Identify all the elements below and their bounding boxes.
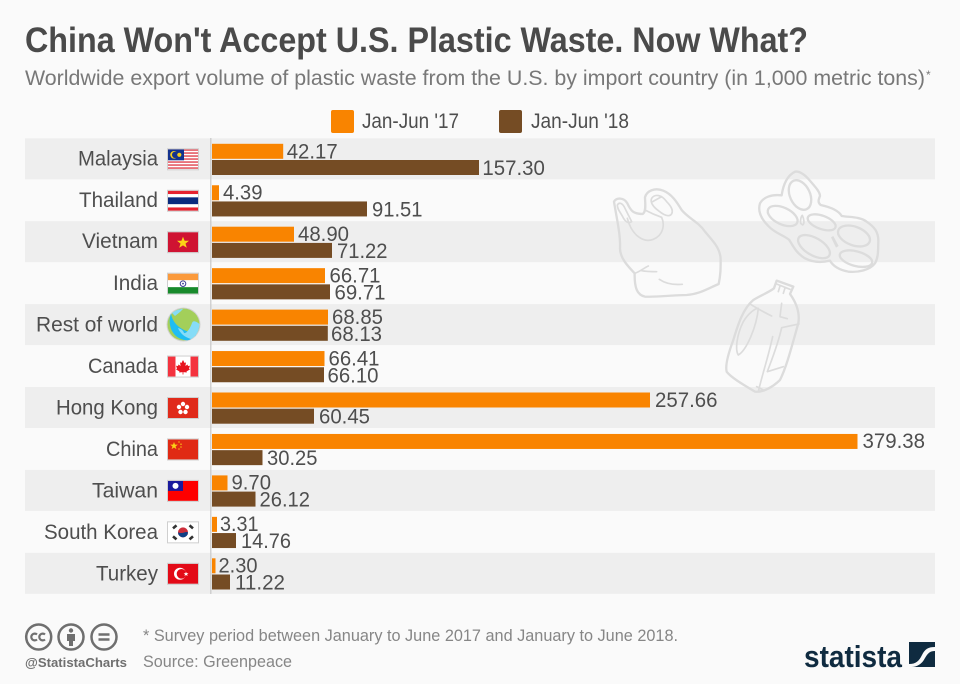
value: 3.31: 3.31	[220, 513, 258, 536]
label: Thailand: Thailand	[79, 189, 158, 212]
value: 157.30: 157.30	[482, 157, 545, 180]
value: 91.51: 91.51	[372, 198, 422, 222]
value: 71.22: 71.22	[337, 240, 388, 263]
icon: attribution	[58, 624, 84, 650]
flag: Malaysia	[168, 149, 198, 170]
label: India: India	[113, 272, 158, 295]
legend	[331, 110, 629, 133]
legend: Jan-Jun '18: Jan-Jun '18	[531, 110, 629, 133]
handle: @StatistaCharts: @StatistaCharts	[25, 656, 127, 670]
bar: South Korea 2018	[212, 533, 236, 548]
value: 14.76: 14.76	[241, 530, 291, 553]
source: Source: Greenpeace	[143, 653, 292, 671]
value: 11.22: 11.22	[235, 572, 285, 594]
value: 26.12: 26.12	[260, 488, 310, 512]
value: 30.25: 30.25	[267, 447, 318, 470]
row: Taiwan	[92, 472, 310, 512]
value: 257.66: 257.66	[655, 389, 718, 412]
icon: six-pack rings	[759, 172, 878, 272]
subtitle: Worldwide export volume of plastic waste from the U.S. by import country (in 1,000 metric tons)	[25, 67, 925, 90]
legend: Jan-Jun '17: Jan-Jun '17	[362, 110, 459, 133]
label: Canada: Canada	[88, 355, 158, 378]
icon: no derivatives	[92, 624, 116, 650]
icon: plastic jug	[726, 281, 799, 392]
footnote: * Survey period between January to June 2017 and January to June 2018.	[143, 627, 678, 645]
bar: Turkey 2017	[212, 558, 216, 573]
icon: cc	[26, 624, 51, 650]
flag: Hong Kong	[168, 398, 198, 418]
bar: Rest of world 2018	[212, 326, 328, 341]
value: 68.85: 68.85	[332, 306, 383, 329]
logo mark	[909, 642, 935, 667]
flag: Taiwan	[168, 480, 198, 501]
row: Thailand	[79, 182, 422, 222]
value: 60.45: 60.45	[319, 406, 370, 429]
label: China: China	[106, 438, 158, 461]
value: 9.70: 9.70	[232, 472, 271, 495]
bar: Thailand 2018	[212, 201, 367, 216]
bar: Vietnam 2018	[212, 243, 332, 258]
bar: Canada 2018	[212, 367, 324, 382]
icon: plastic bag, six-pack rings and jug illustration	[614, 172, 878, 392]
flag: Vietnam	[168, 232, 198, 253]
row: India	[113, 265, 386, 304]
flag: Turkey	[168, 563, 198, 584]
bar: Hong Kong 2017	[212, 392, 650, 408]
bar: Taiwan 2018	[212, 492, 256, 507]
row background bands	[25, 138, 935, 594]
bar: Rest of world 2017	[212, 310, 328, 325]
flag: South Korea	[168, 522, 198, 543]
bar: India 2017	[212, 268, 325, 283]
bar: Canada 2017	[212, 351, 324, 366]
subtitle footnote mark: *	[926, 68, 931, 82]
icon: plastic bag	[614, 189, 721, 297]
bar: India 2018	[212, 284, 330, 299]
value: 68.13: 68.13	[331, 323, 382, 346]
bar: China 2018	[212, 450, 262, 465]
bar: Hong Kong 2018	[212, 409, 314, 424]
flag: Canada	[168, 356, 198, 377]
legend: Jan-Jun '17	[331, 110, 459, 133]
row: Turkey	[96, 554, 285, 594]
vertical axis line	[210, 138, 211, 594]
value: 69.71: 69.71	[334, 281, 386, 304]
bar: Turkey 2018	[212, 574, 230, 590]
logo: statista	[804, 639, 935, 674]
icon: Creative Commons licence badges	[26, 624, 117, 650]
value: 48.90: 48.90	[298, 223, 349, 246]
label: Hong Kong: Hong Kong	[56, 396, 158, 420]
flag: Thailand	[168, 190, 198, 211]
bar: Malaysia 2018	[212, 160, 479, 175]
row: Rest of world	[36, 306, 383, 346]
bar: South Korea 2017	[212, 517, 217, 532]
value: 4.39: 4.39	[223, 182, 262, 205]
value: 66.41: 66.41	[328, 348, 380, 370]
bar: China 2017	[212, 434, 858, 449]
row: Hong Kong	[56, 389, 718, 429]
label: Malaysia: Malaysia	[78, 148, 158, 170]
title: China Won't Accept U.S. Plastic Waste. Now What?	[25, 21, 808, 60]
bar: Vietnam 2017	[212, 227, 294, 242]
row: South Korea	[44, 513, 291, 553]
flag: India	[168, 273, 198, 294]
icon: globe	[166, 308, 200, 342]
label: Taiwan: Taiwan	[92, 480, 158, 502]
value: 42.17: 42.17	[287, 140, 338, 163]
label: Vietnam: Vietnam	[82, 230, 158, 253]
value: 66.10: 66.10	[328, 364, 378, 387]
label: South Korea: South Korea	[44, 521, 158, 544]
label: Turkey: Turkey	[96, 562, 158, 586]
row: Vietnam	[82, 223, 388, 263]
row: China	[106, 430, 925, 470]
row: Canada	[88, 348, 380, 387]
logo wordmark: statista	[804, 639, 903, 674]
row: Malaysia	[78, 140, 545, 180]
value: 66.71: 66.71	[330, 265, 380, 288]
bar: Taiwan 2017	[212, 475, 228, 490]
label: Rest of world: Rest of world	[36, 314, 158, 336]
value: 2.30: 2.30	[218, 554, 258, 578]
value: 379.38: 379.38	[862, 430, 925, 453]
bar: Malaysia 2017	[212, 144, 283, 159]
bar: Thailand 2017	[212, 185, 219, 200]
flag: China	[168, 439, 198, 460]
